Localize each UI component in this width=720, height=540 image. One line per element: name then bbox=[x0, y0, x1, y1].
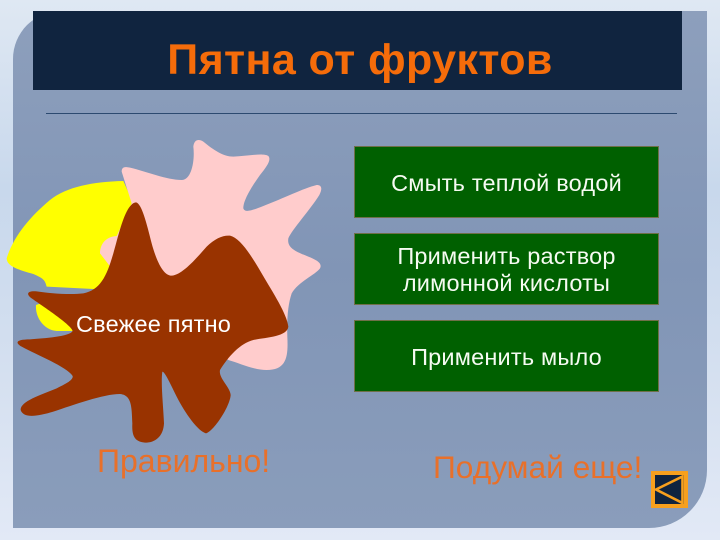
title banner: Пятна от фруктов bbox=[167, 36, 553, 84]
option button: citric acid: Применить раствор bbox=[397, 243, 616, 269]
pink stain bbox=[100, 140, 321, 370]
feedback: think again: Подумай еще! bbox=[433, 449, 642, 485]
brown stain bbox=[18, 202, 288, 443]
option button: soap: Применить мыло bbox=[411, 344, 602, 370]
yellow stain bbox=[7, 181, 133, 331]
stain label: Свежее пятно bbox=[76, 311, 231, 337]
title banner bbox=[33, 11, 682, 90]
option button: warm water bbox=[354, 146, 659, 218]
divider line bbox=[46, 113, 677, 114]
feedback: correct: Правильно! bbox=[97, 443, 270, 479]
icon: back button bbox=[651, 471, 688, 508]
option button: soap bbox=[354, 320, 659, 392]
option button: warm water: Смыть теплой водой bbox=[391, 170, 622, 196]
option button: citric acid: лимонной кислоты bbox=[403, 270, 610, 296]
stain illustration bbox=[6, 140, 322, 443]
option button: citric acid bbox=[354, 233, 659, 305]
